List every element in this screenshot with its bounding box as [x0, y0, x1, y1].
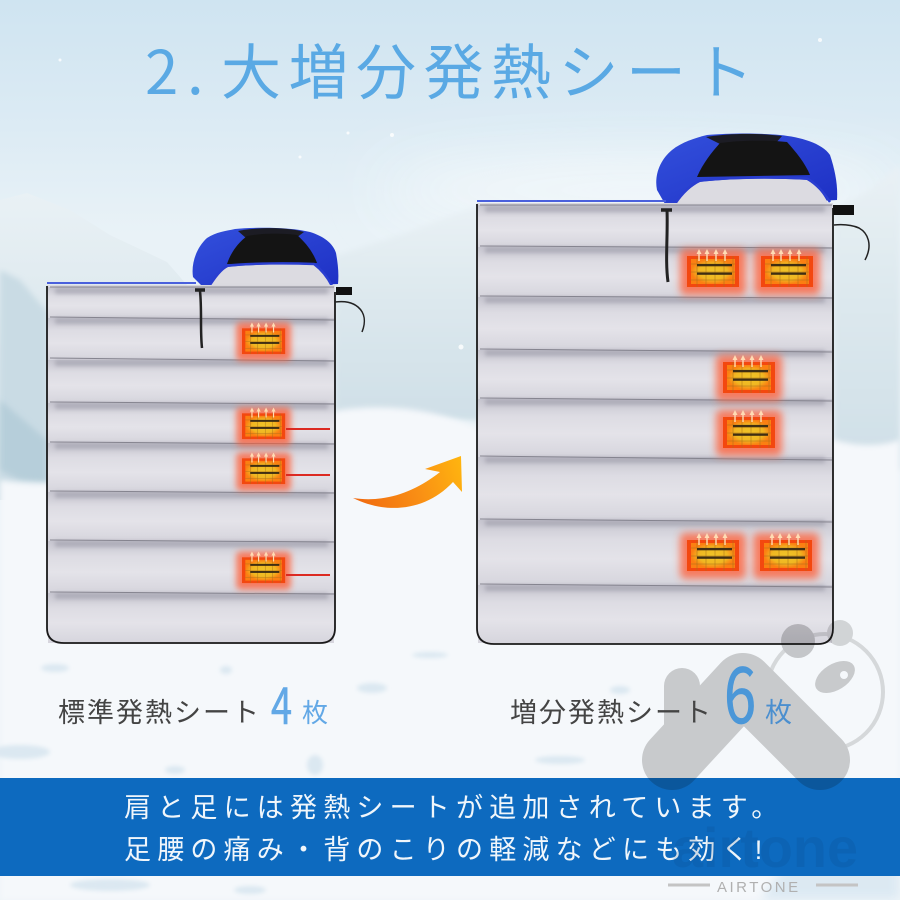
red indicator lines: [286, 429, 330, 575]
drawcord and strap: [661, 205, 869, 282]
band text: 肩と足には発熱シートが追加されています。: [124, 793, 784, 823]
quilted body: [477, 201, 833, 644]
label: enhanced heating sheets: 6: [724, 636, 756, 746]
quilted body: [47, 283, 335, 644]
label: standard heating sheets: [58, 665, 328, 739]
label: enhanced heating sheets: 枚: [765, 698, 792, 728]
snow flecks: [0, 652, 630, 894]
hood: [193, 228, 338, 290]
watermark: brand wordmark: airtone: [672, 816, 858, 879]
sleeping bag: enhanced: [477, 134, 869, 644]
sleeping bag: standard: [47, 228, 364, 644]
watermark: panda logo: [672, 620, 883, 760]
title: 大増分発熱シート: [221, 40, 761, 107]
arrow: standard to enhanced: [353, 456, 462, 508]
band text: 足腰の痛み・背のこりの軽減などにも効く!: [124, 835, 769, 865]
label: standard heating sheets: 4: [271, 665, 292, 739]
snowflakes: [58, 38, 822, 350]
label: enhanced heating sheets: 増分発熱シート: [510, 698, 713, 728]
band text: [124, 793, 784, 865]
label: enhanced heating sheets: [510, 636, 792, 746]
hood: [656, 134, 837, 208]
heating pads: standard 4: [236, 323, 291, 590]
title: .: [187, 25, 204, 112]
heating pads: enhanced 6: [680, 249, 820, 579]
label: standard heating sheets: 標準発熱シート: [58, 698, 261, 728]
label: standard heating sheets: 枚: [302, 698, 328, 728]
blue message band: [0, 778, 900, 876]
title: [145, 25, 761, 112]
title: 2: [145, 25, 178, 112]
watermark: brand wordmark: AIRTONE: [717, 879, 801, 896]
drawcord and strap: [195, 287, 364, 348]
